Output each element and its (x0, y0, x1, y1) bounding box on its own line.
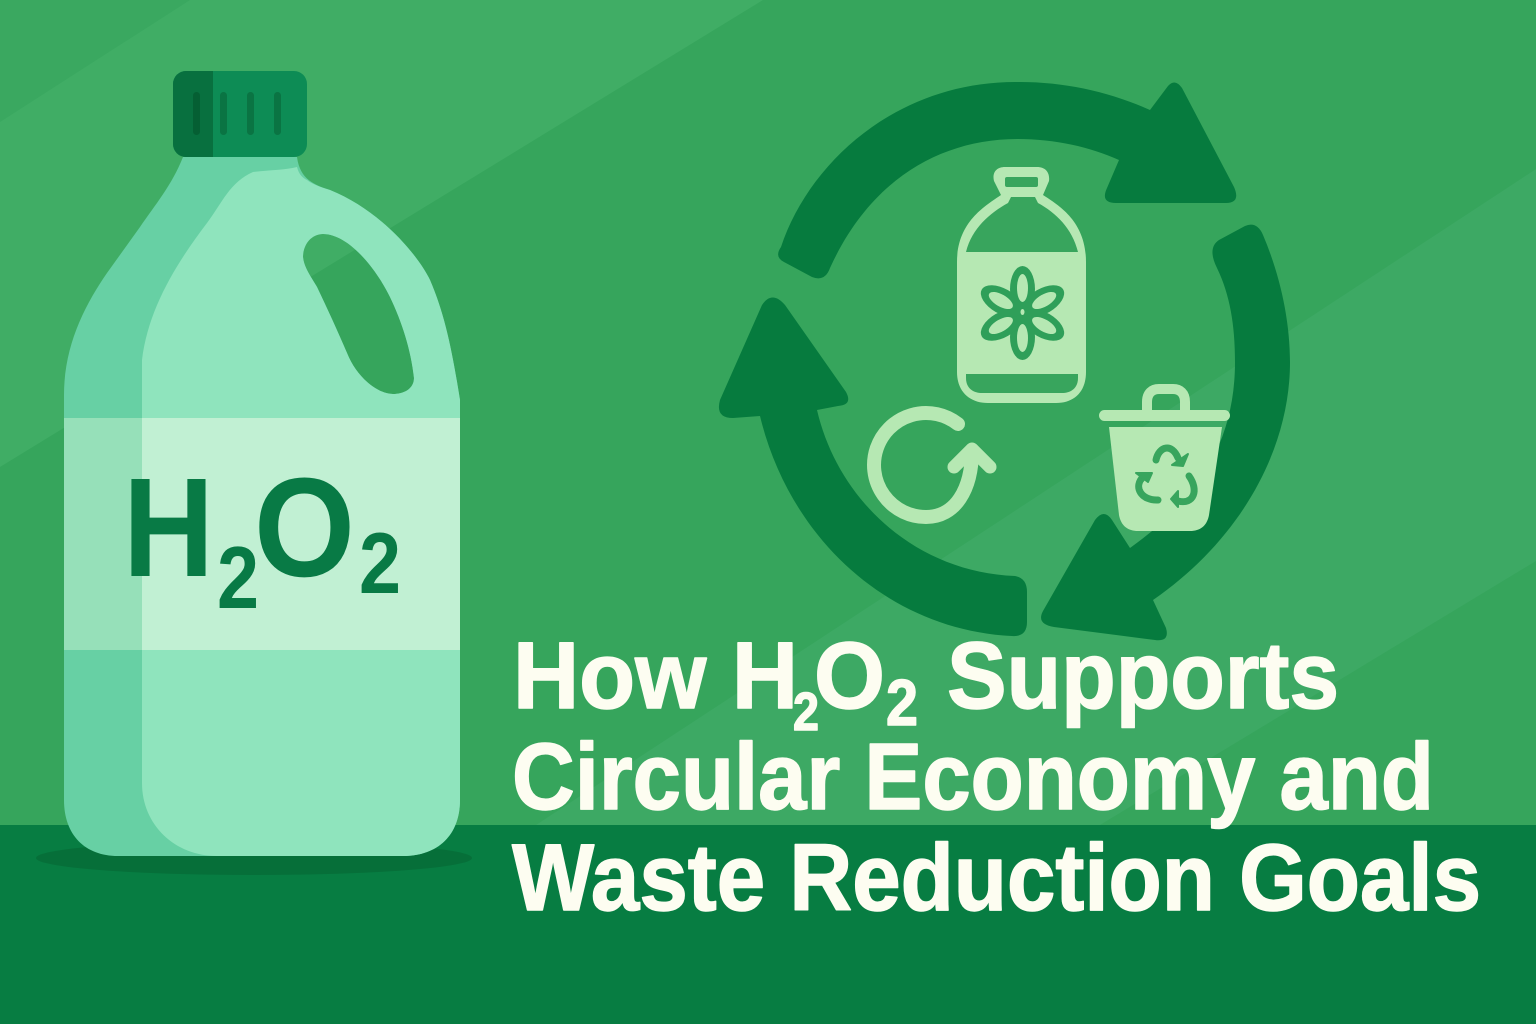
bottle body (64, 157, 460, 856)
bottle shadow (36, 841, 472, 875)
label text: H2O2: H (123, 448, 214, 606)
icon: circular arrow (874, 413, 990, 517)
bottle label (64, 418, 460, 650)
label text: H2O2: 2 (217, 528, 259, 627)
title: Circular Economy and (512, 724, 1434, 830)
icon: recycling bin (1099, 389, 1230, 531)
title (512, 623, 1481, 931)
title: 2 (793, 682, 819, 742)
label text: H2O2 (123, 448, 401, 627)
icon: flower bottle (957, 167, 1086, 403)
icon: H2O2 bottle (64, 71, 460, 856)
label text: H2O2: 2 (359, 516, 401, 612)
title: Supports (947, 623, 1339, 729)
icon: flower (976, 266, 1069, 360)
ground band (0, 825, 1536, 1024)
bottle cap (173, 71, 307, 157)
arrow: left (719, 298, 1027, 636)
arrow: top (778, 82, 1236, 278)
title: 2 (886, 666, 918, 739)
label text: H2O2: O (254, 448, 355, 606)
arrow: right (1041, 225, 1290, 640)
bottle highlight (142, 167, 460, 856)
icon: recycling symbol (1136, 448, 1194, 507)
title: O (814, 623, 885, 729)
recycling cycle arrows (719, 82, 1290, 640)
title: How H (513, 623, 798, 729)
